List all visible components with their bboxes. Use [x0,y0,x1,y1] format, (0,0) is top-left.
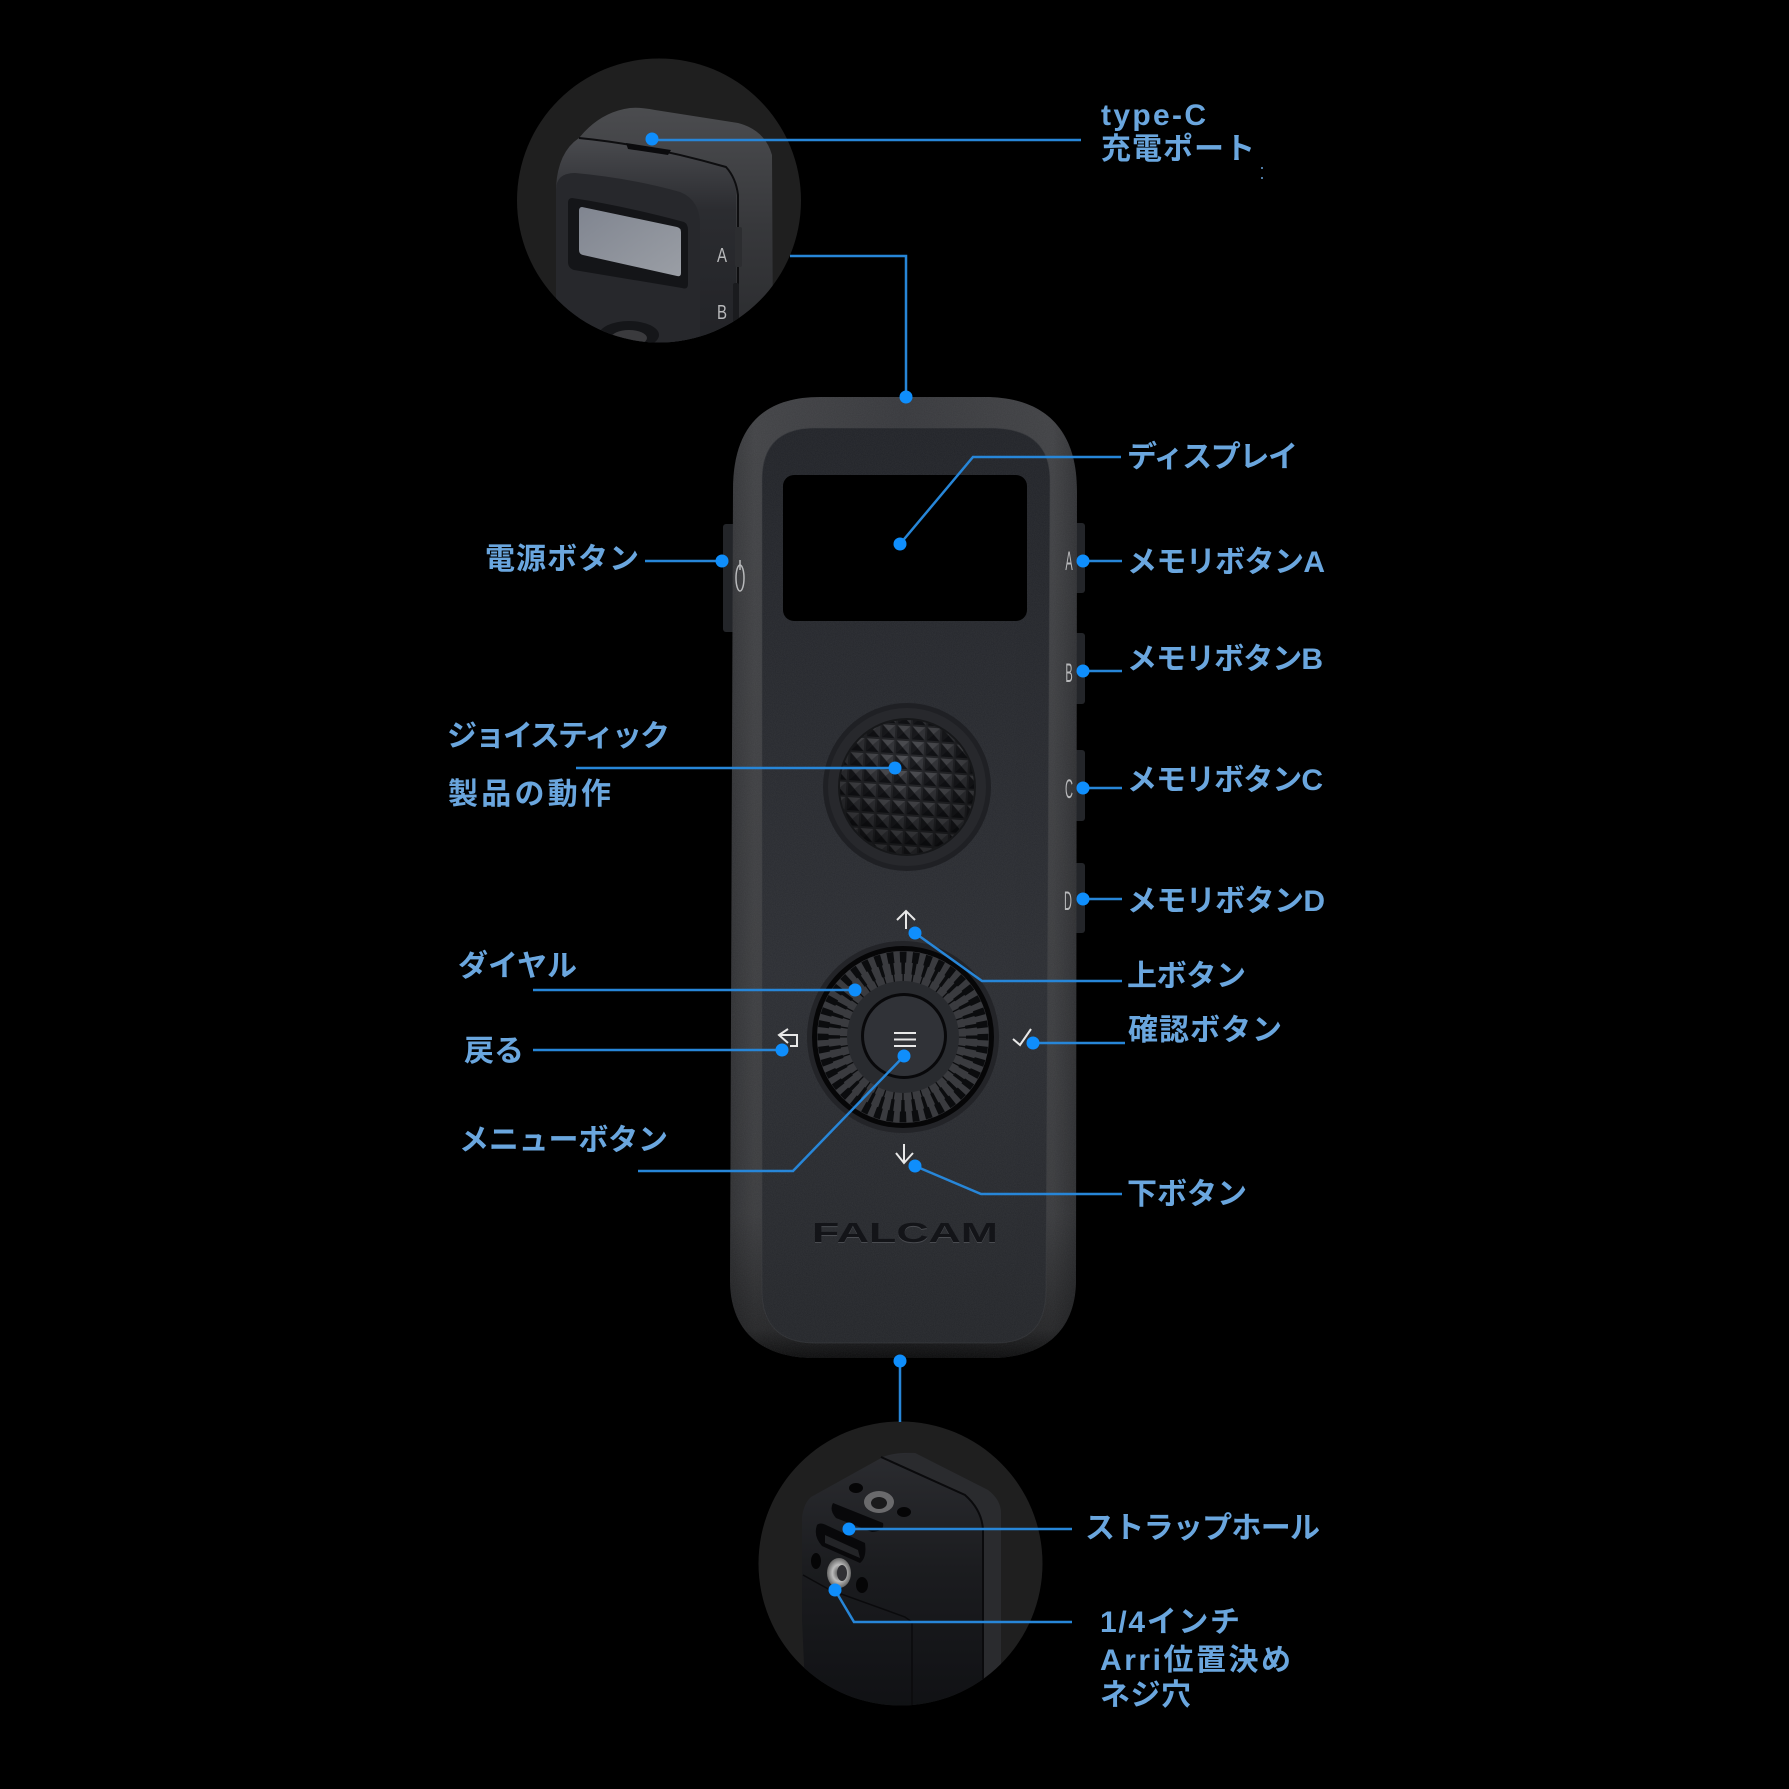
callout: power button [485,543,728,576]
icon: power [736,560,744,591]
callout: screw hole [828,1584,1291,1712]
callout: memory button D [1076,885,1325,918]
label: joystick: ジョイスティック [447,720,670,753]
label: dial: ダイヤル [458,949,577,983]
label: type-C charging port: type-C [1101,99,1206,132]
top detail circle: type-C port view [517,58,801,349]
callout: confirm button [1026,1014,1282,1050]
leader line [1083,787,1122,789]
callout: back [464,1035,788,1068]
dot [716,554,728,568]
body shading [730,397,1077,1358]
top detail circle: type-C port view: A [717,244,727,267]
leader line [533,1049,782,1051]
button letter B: B [1065,658,1073,689]
logo: FALCAM: FALCAM [812,1217,998,1248]
label: memory D: メモリボタンD [1127,885,1325,918]
callout: up button [908,926,1246,993]
leader line [533,989,855,991]
leader line [1083,670,1122,672]
leader line [835,1590,1072,1622]
dot [908,1160,922,1172]
callout: dial [458,949,862,996]
surface grain [730,397,1077,1358]
joystick [823,703,991,871]
callout: memory button B [1076,643,1323,678]
label: memory A: メモリボタンA [1127,546,1325,579]
icon: confirm check [1013,1029,1031,1045]
button letter A: A [1065,546,1073,577]
leader line [849,1528,1072,1530]
callout: memory button A [1076,546,1325,579]
callout: down button [908,1160,1247,1211]
button letter D: D [1064,886,1072,917]
callout: menu button [459,1050,910,1171]
button letter C: C [1065,774,1073,805]
dot [842,1522,856,1536]
label: strap hole: ストラップホール [1085,1512,1320,1545]
connector: device to bottom circle [894,1354,906,1422]
label: display: ディスプレイ [1127,440,1298,474]
leader line [638,1056,904,1171]
side button: D [1070,863,1085,933]
leader line [900,457,1121,544]
label: 1/4 inch Arri locating screw hole: 1/4インチ [1100,1606,1240,1639]
dot [1076,892,1090,906]
label: menu button: メニューボタン [459,1124,668,1157]
label: memory B: メモリボタンB [1127,643,1323,676]
callout: memory button C [1076,764,1323,797]
side button: power [723,524,737,632]
icon: down arrow [896,1144,913,1163]
stray marks beside type-C label [1261,167,1263,179]
dot [776,1044,788,1056]
label: joystick: 製品の動作 [448,778,611,811]
label: type-C charging port: 充電ポート [1101,133,1255,166]
dial [807,941,999,1133]
dot [848,984,862,996]
dot [898,1050,910,1062]
leader line [1033,1042,1125,1044]
dot [1076,782,1090,794]
icon: up arrow [897,911,915,929]
label: back: 戻る [464,1035,524,1068]
dot [1076,664,1090,678]
icon: back arrow [779,1029,797,1046]
dot [646,132,658,146]
icon: menu [894,1033,916,1046]
connector: top circle to device [790,256,912,404]
callout: joystick [447,720,902,811]
label: down button: 下ボタン [1127,1178,1247,1211]
front panel [762,428,1050,1343]
top detail circle: type-C port view: B [717,301,727,324]
side button: A [1070,523,1085,593]
callout: display [894,440,1298,550]
side button: B [1070,633,1085,704]
display window [783,475,1027,621]
leader line [1083,560,1122,562]
leader line [915,1166,1122,1194]
callout: strap hole [842,1512,1320,1545]
dot [828,1584,842,1596]
leader line [576,767,895,769]
dot [1076,554,1090,568]
device body [730,397,1077,1358]
dot [894,538,906,550]
label: power button: 電源ボタン [485,543,639,576]
leader line [645,560,722,562]
logo: FALCAM: FALCAM [812,1218,998,1249]
label: up button: 上ボタン [1127,960,1246,993]
bottom detail circle: strap hole and screw hole view [758,1422,1042,1710]
side button: C [1070,750,1085,821]
leader line [652,139,1081,141]
device: remote controller [723,397,1085,1358]
leader line [915,933,1122,981]
label: 1/4 inch Arri locating screw hole: ネジ穴 [1100,1679,1191,1712]
dot [908,926,922,940]
logo: FALCAM [812,1217,998,1249]
dot [1026,1036,1040,1050]
leader line [1083,898,1122,900]
callout: type-C port [646,99,1255,166]
label: memory C: メモリボタンC [1127,764,1323,797]
label: 1/4 inch Arri locating screw hole: Arri位置決め [1100,1644,1291,1677]
dot [888,762,902,774]
label: confirm button: 確認ボタン [1128,1014,1282,1047]
